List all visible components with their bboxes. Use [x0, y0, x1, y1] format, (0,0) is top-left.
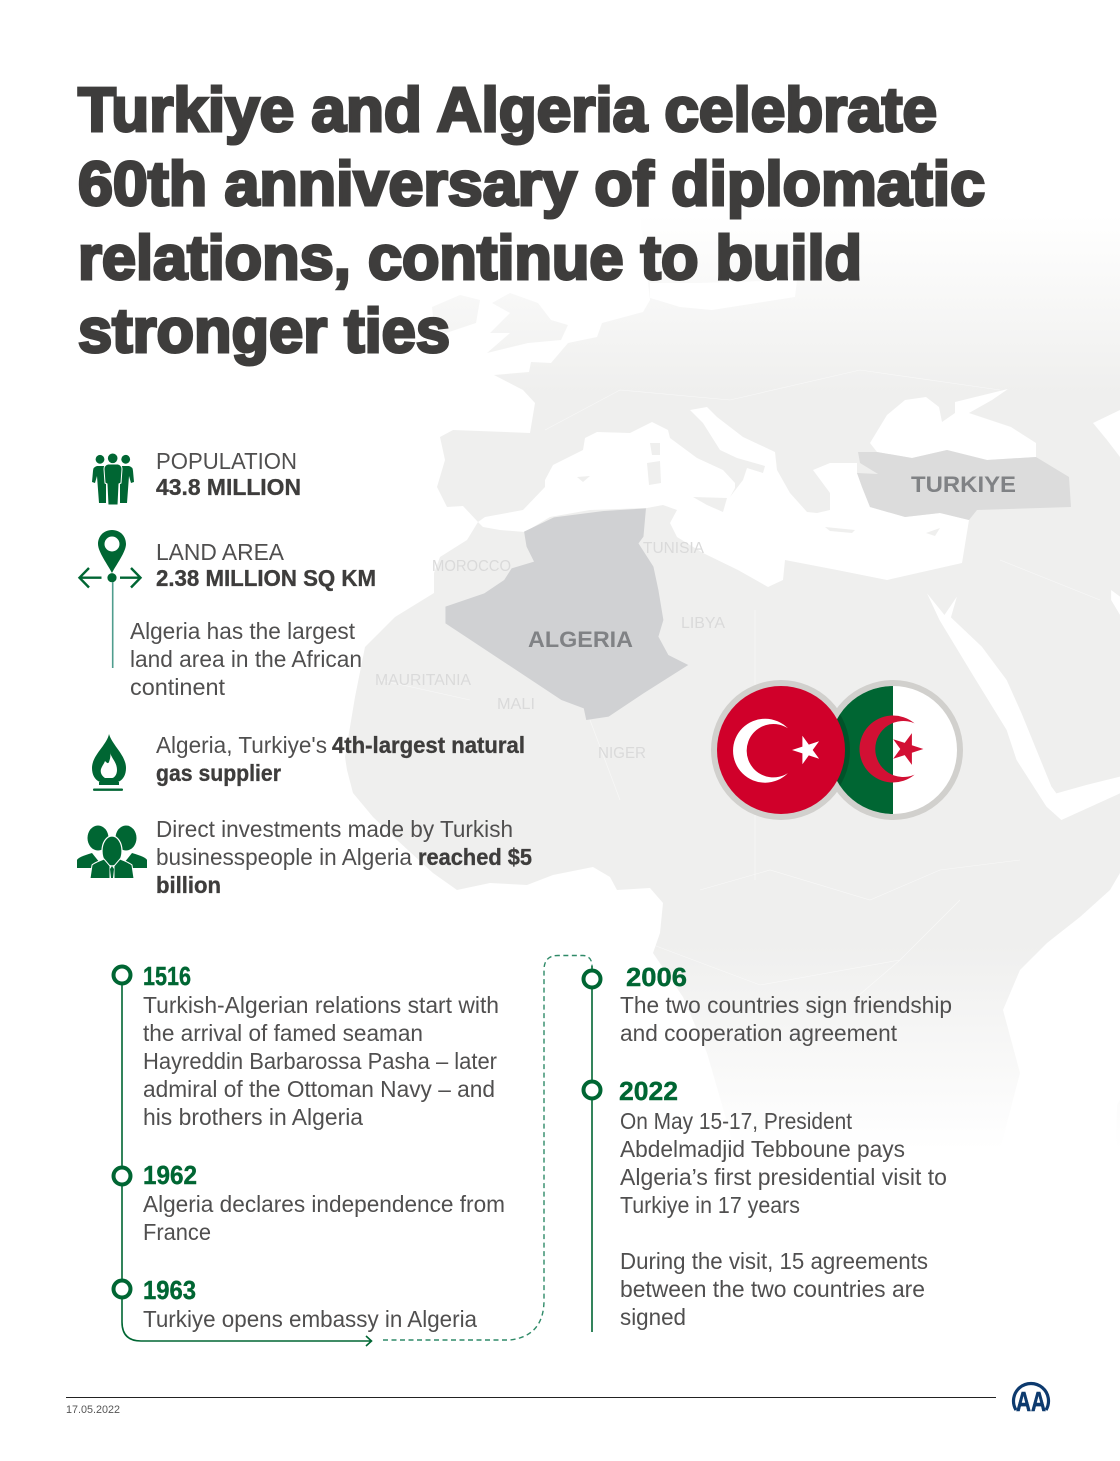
neighbouring country labels — [375, 540, 726, 762]
fact: natural gas: 4th-largest natural — [332, 732, 525, 758]
timeline entry: 2022: Turkiye in 17 years — [620, 1192, 800, 1218]
logo: AA: AA — [1016, 1386, 1046, 1417]
timeline entry: 2006: 2006 — [626, 962, 687, 992]
title: stronger ties — [78, 297, 450, 366]
stat: population: 43.8 MILLION — [156, 474, 301, 500]
neighbouring country labels: MALI — [497, 696, 535, 713]
title — [78, 76, 985, 366]
fact: natural gas — [156, 732, 525, 786]
country: Algeria: ALGERIA — [528, 627, 633, 652]
neighbouring country labels: TUNISIA — [643, 540, 705, 557]
timeline entry: 2022: During the visit, 15 agreements — [620, 1248, 928, 1274]
fact: direct investments: businesspeople in Algeria — [156, 844, 413, 870]
stat: land area: LAND AREA — [156, 539, 284, 565]
title: 60th anniversary of diplomatic — [78, 150, 985, 219]
timeline entry: 2022: Abdelmadjid Tebboune pays — [620, 1136, 905, 1162]
fact: direct investments: Direct investments made by Turkish — [156, 816, 513, 842]
timeline marker: 2006 — [584, 970, 600, 988]
neighbouring country labels: NIGER — [598, 745, 646, 762]
timeline entry: 1963: Turkiye opens embassy in Algeria — [143, 1306, 478, 1332]
timeline entry: 2022 — [619, 1076, 947, 1330]
stat: land area — [156, 539, 376, 591]
title: relations, continue to build — [78, 224, 862, 293]
flag: Algeria — [837, 680, 963, 820]
stat: population — [156, 448, 301, 500]
flag: Turkiye — [717, 686, 845, 814]
land area note: continent — [130, 674, 225, 700]
neighbouring country labels: LIBYA — [681, 615, 726, 632]
neighbouring country labels: MAURITANIA — [375, 672, 472, 689]
land area note: Algeria has the largest — [130, 618, 355, 644]
timeline entry: 1516: his brothers in Algeria — [143, 1104, 364, 1130]
timeline entry: 2006: The two countries sign friendship — [620, 992, 952, 1018]
timeline entry: 1516: Turkish-Algerian relations start with — [143, 992, 499, 1018]
stat: population: POPULATION — [156, 448, 297, 474]
country: Turkiye — [857, 450, 1071, 520]
land area note: land area in the African — [130, 646, 362, 672]
fact: natural gas: Algeria, Turkiye's — [156, 732, 327, 758]
timeline entry: 1516: 1516 — [143, 961, 191, 991]
date: 17.05.2022 — [66, 1404, 120, 1416]
icon: gas flame — [92, 734, 126, 791]
timeline marker: 1962 — [114, 1168, 130, 1184]
timeline marker: 1963 — [114, 1280, 130, 1298]
title: Turkiye and Algeria celebrate — [78, 76, 937, 145]
fact: direct investments: reached $5 — [418, 844, 532, 870]
icon: map pin with arrows — [80, 530, 141, 668]
icon: businesspeople — [77, 826, 147, 878]
footer rule — [66, 1397, 996, 1398]
background map — [345, 215, 1120, 1185]
timeline entry: 1516: Hayreddin Barbarossa Pasha – later — [143, 1048, 497, 1074]
timeline entry: 1962: Algeria declares independence from — [143, 1191, 505, 1217]
timeline entry: 2022: 2022 — [619, 1076, 678, 1106]
timeline entry: 2006 — [620, 962, 952, 1046]
fact: direct investments — [156, 816, 532, 898]
fact: natural gas: gas supplier — [156, 760, 281, 786]
land area note — [130, 618, 362, 700]
timeline entry: 1516: admiral of the Ottoman Navy – and — [143, 1076, 495, 1102]
timeline entry: 2022: signed — [620, 1304, 686, 1330]
country: Algeria — [445, 508, 688, 720]
stat: land area: 2.38 MILLION SQ KM — [156, 565, 376, 591]
timeline connector — [122, 956, 592, 1346]
fact: direct investments: billion — [156, 872, 221, 898]
timeline entry: 2022: between the two countries are — [620, 1276, 925, 1302]
timeline entry: 2006: and cooperation agreement — [620, 1020, 897, 1046]
timeline entry: 2022: On May 15-17, President — [620, 1108, 852, 1134]
timeline entry: 1962: 1962 — [143, 1160, 197, 1190]
timeline entry: 2022: Algeria’s first presidential visit to — [620, 1164, 947, 1190]
timeline entry: 1963: 1963 — [143, 1275, 196, 1305]
country: Turkiye: TURKIYE — [911, 472, 1016, 497]
timeline entry: 1516: the arrival of famed seaman — [143, 1020, 423, 1046]
neighbouring country labels: MOROCCO — [432, 558, 511, 575]
seas — [478, 280, 1120, 820]
icon: population — [92, 454, 134, 505]
timeline entry: 1962: France — [143, 1219, 211, 1245]
flags — [711, 680, 963, 820]
timeline marker: 1516 — [114, 966, 130, 984]
timeline entry: 1963 — [143, 1275, 478, 1332]
timeline entry: 1962 — [143, 1160, 505, 1245]
timeline entry: 1516 — [143, 961, 499, 1130]
timeline marker: 2022 — [584, 1082, 600, 1098]
